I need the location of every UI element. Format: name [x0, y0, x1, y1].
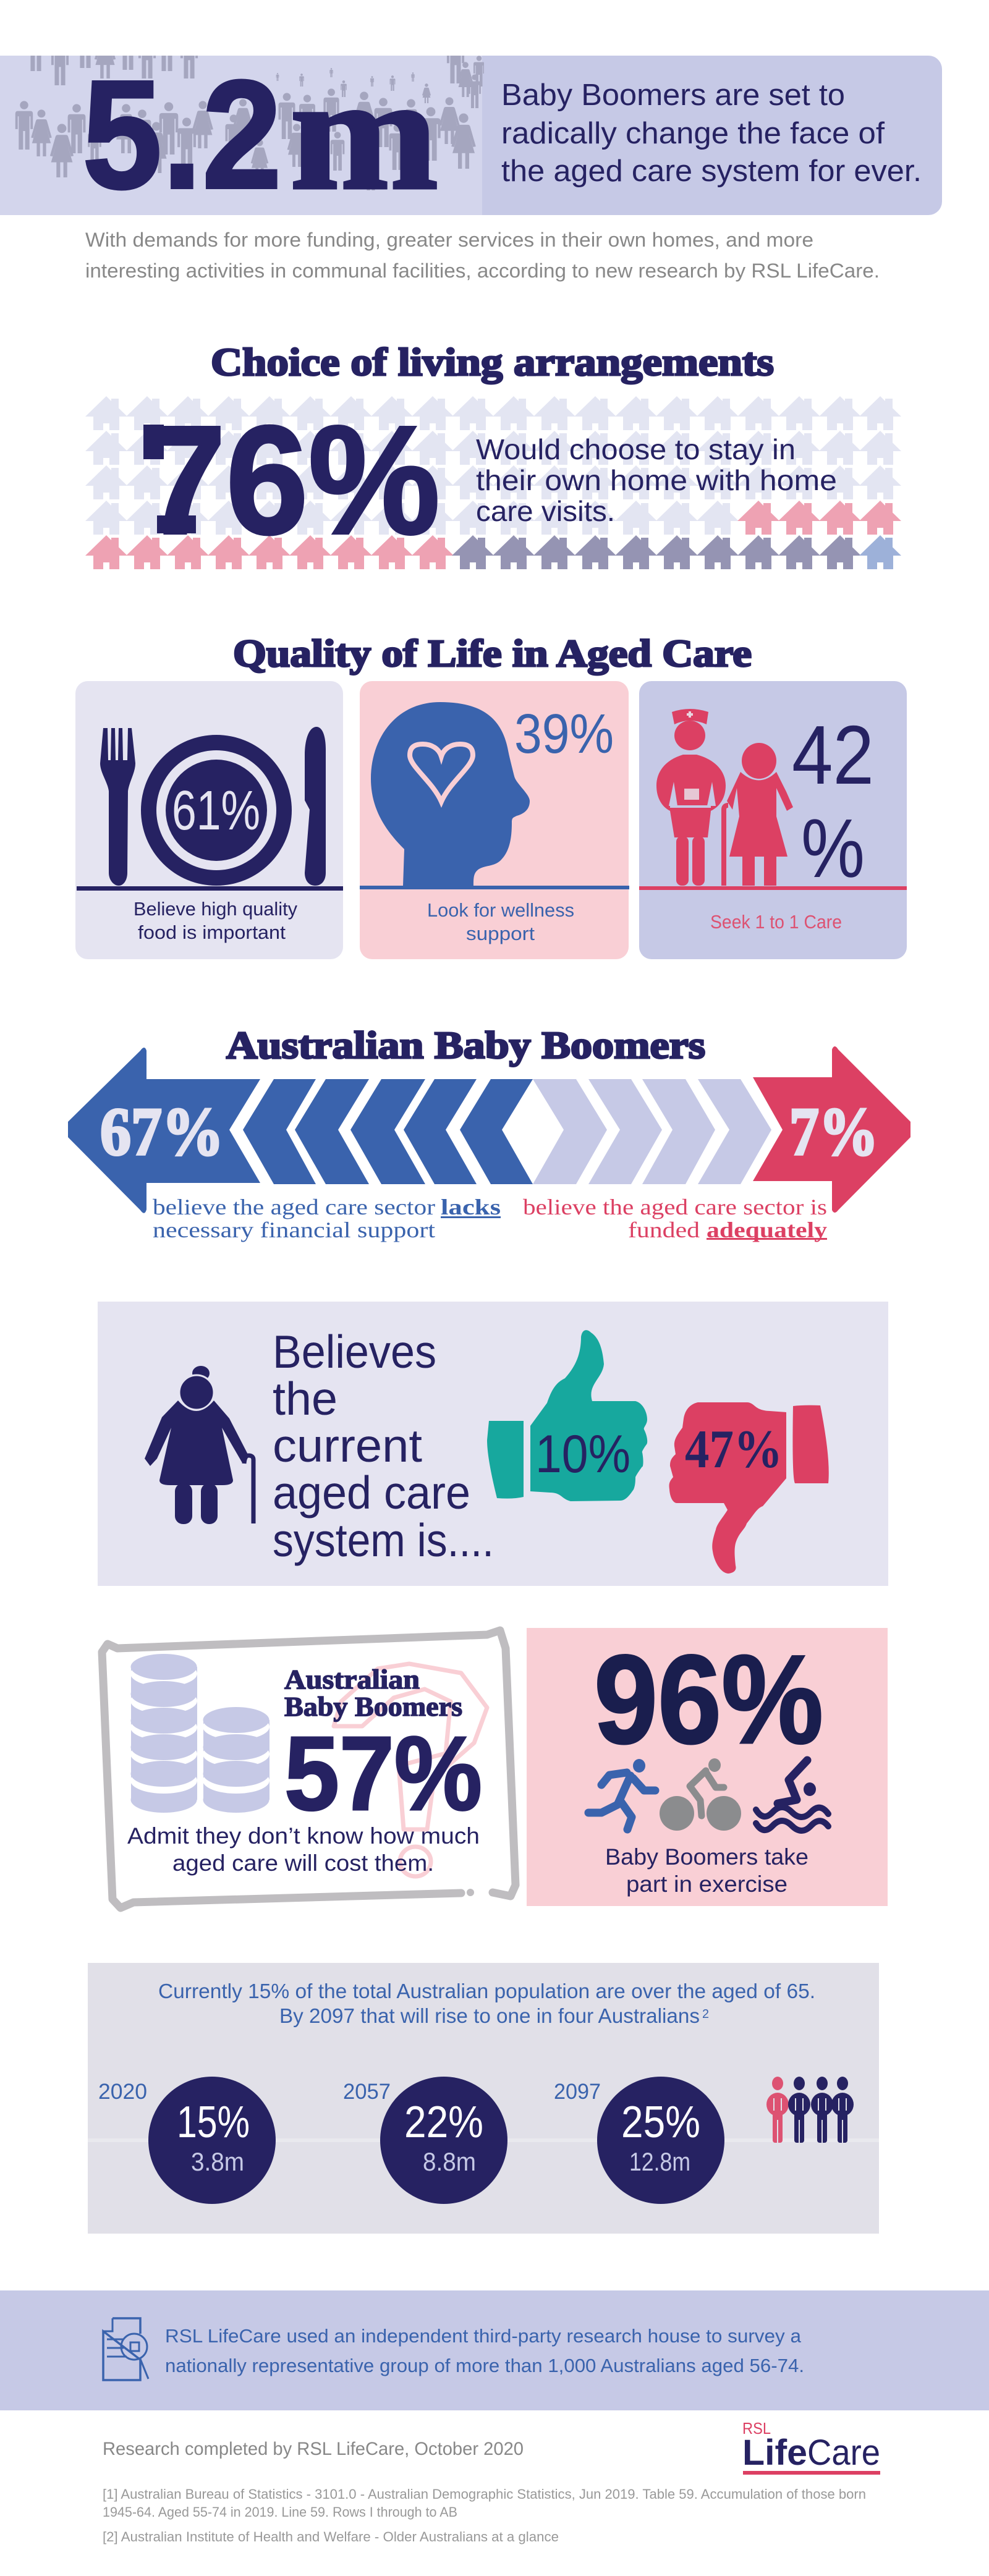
year labels: 2020 [98, 2080, 147, 2104]
right caption [523, 1195, 827, 1242]
headline statement: the aged care system for ever. [501, 155, 922, 188]
61 percent: 61% [172, 780, 260, 842]
intro text [85, 229, 880, 282]
circle 2097: 12.8m [629, 2147, 690, 2176]
47 percent: 47% [685, 1420, 783, 1480]
icon: head with heart [371, 702, 530, 886]
icon: plate [141, 735, 292, 886]
icon: nurse [656, 709, 726, 886]
caption: food is important [138, 922, 286, 943]
76 percent description: Would choose to stay in [476, 433, 796, 465]
statement: the [273, 1373, 337, 1425]
hero banner [0, 56, 942, 215]
circle 2057: 22% [404, 2098, 483, 2147]
right caption: funded [628, 1218, 700, 1242]
blue chevrons [243, 1079, 533, 1184]
circle 2057: 8.8m [423, 2147, 476, 2176]
sub-heading: Baby Boomers [284, 1692, 462, 1722]
footnotes: 1945-64. Aged 55-74 in 2019. Line 59. Rows I through to AB [103, 2504, 457, 2520]
7 percent: 7% [789, 1094, 878, 1169]
icon: runner [588, 1759, 655, 1829]
headline number: 5.2 [82, 48, 282, 221]
year labels: 2057 [343, 2080, 391, 2104]
icon: elderly woman with cane [724, 743, 793, 886]
panel: beliefs about current system [98, 1302, 888, 1586]
heading: Quality of Life in Aged Care [233, 633, 752, 675]
headline number [82, 44, 438, 223]
10 percent: 10% [535, 1425, 630, 1484]
headline statement [501, 78, 922, 188]
question mark sketch [334, 1664, 487, 1876]
section: quality of life [75, 633, 907, 959]
left caption: necessary financial support [153, 1218, 435, 1242]
research credit: Research completed by RSL LifeCare, October 2020 [103, 2439, 524, 2459]
caption: Believe high quality [134, 898, 297, 920]
76 percent figure: 76% [143, 394, 440, 566]
sub-heading: Australian [284, 1664, 420, 1695]
caption: support [466, 923, 535, 944]
caption: Admit they don’t know how much [127, 1823, 480, 1849]
icon: thumbs down [669, 1402, 829, 1574]
caption [605, 1844, 809, 1897]
67 percent: 67% [100, 1094, 224, 1169]
icon: elderly woman [145, 1366, 253, 1524]
39 percent: 39% [514, 703, 614, 765]
caption: part in exercise [626, 1871, 787, 1897]
caption: aged care will cost them. [172, 1850, 434, 1876]
logo: RSL LifeCare: Life [742, 2433, 807, 2473]
circle 2057 [380, 2077, 507, 2204]
circle 2020: 3.8m [191, 2147, 244, 2176]
footnotes [103, 2486, 866, 2544]
caption: Baby Boomers take [605, 1844, 809, 1870]
right caption: adequately [707, 1218, 827, 1242]
statement: Currently 15% of the total Australian population are over the aged of 65. [158, 1980, 815, 2002]
headline statement: radically change the face of [501, 117, 885, 150]
headline number: m [290, 44, 438, 223]
band: research methodology [0, 2290, 989, 2410]
icon: one in four people [766, 2077, 854, 2143]
panel: wellness [360, 681, 629, 959]
year labels: 2097 [554, 2080, 601, 2104]
left caption: lacks [441, 1195, 501, 1219]
sub-heading [284, 1664, 462, 1722]
panel: food [75, 681, 343, 959]
heading: Choice of living arrangements [211, 340, 774, 384]
76 percent description: their own home with home [476, 464, 837, 496]
intro text: interesting activities in communal facilities, according to new research by RSL LifeCare. [85, 260, 880, 282]
circle 2097 [597, 2077, 724, 2204]
icon: knife [305, 727, 326, 886]
statement [158, 1980, 815, 2027]
caption [427, 899, 574, 944]
statement [273, 1326, 494, 1566]
statement: Believes [273, 1326, 436, 1378]
left caption: believe the aged care sector [153, 1195, 435, 1219]
methodology text [165, 2325, 804, 2376]
logo: RSL LifeCare [742, 2419, 880, 2475]
statement: 2 [702, 2007, 709, 2021]
circle 2020 [148, 2077, 276, 2204]
crowd of people icons [15, 56, 484, 190]
statement: current [273, 1420, 422, 1472]
footnotes: [1] Australian Bureau of Statistics - 3101.0 - Australian Demographic Statistics, Jun 2019. Table 59. Accumulation of those born [103, 2486, 866, 2502]
circle 2020: 15% [177, 2098, 250, 2147]
caption: Seek 1 to 1 Care [710, 911, 842, 933]
circle 2097: 25% [621, 2098, 700, 2147]
right arrow [753, 1046, 910, 1213]
96 percent: 96% [594, 1629, 823, 1770]
methodology text: nationally representative group of more than 1,000 Australians aged 56-74. [165, 2355, 804, 2376]
76 percent description [476, 433, 837, 527]
footnotes: [2] Australian Institute of Health and Welfare - Older Australians at a glance [103, 2529, 559, 2544]
logo: RSL LifeCare: Care [807, 2433, 880, 2473]
panel: exercise [527, 1628, 888, 1906]
42 percent [792, 708, 874, 895]
year labels [98, 2080, 601, 2104]
57 percent: 57% [284, 1715, 482, 1832]
caption: Look for wellness [427, 899, 574, 921]
icon: cyclist [660, 1758, 741, 1831]
icon: coin stacks [130, 1654, 270, 1813]
icon: fork [100, 728, 135, 886]
panel: 1 to 1 care [639, 681, 907, 959]
right caption: believe the aged care sector is [523, 1195, 827, 1219]
left arrow [68, 1048, 260, 1213]
42 percent: % [801, 802, 865, 895]
hand-drawn frame [102, 1630, 516, 1908]
caption [134, 898, 297, 943]
icon: swimmer [756, 1760, 828, 1831]
statement: By 2097 that will rise to one in four Australians [279, 2004, 700, 2027]
icon: thumbs up [487, 1330, 647, 1501]
intro text: With demands for more funding, greater services in their own homes, and more [85, 229, 813, 251]
headline statement: Baby Boomers are set to [501, 78, 845, 112]
statement: aged care [273, 1467, 470, 1519]
banner background [0, 56, 942, 215]
heading: Australian Baby Boomers [226, 1025, 705, 1067]
section: choice of living arrangements [85, 340, 901, 569]
light chevrons [533, 1079, 771, 1184]
caption [127, 1823, 480, 1876]
section: Australian Baby Boomers arrows [68, 1025, 910, 1242]
methodology text: RSL LifeCare used an independent third-party research house to survey a [165, 2325, 802, 2347]
76 percent description: care visits. [476, 495, 615, 527]
panel: cost awareness [102, 1630, 516, 1908]
42 percent: 42 [792, 708, 874, 802]
logo: RSL LifeCare: RSL [742, 2419, 771, 2438]
house pictogram grid [85, 396, 901, 569]
panel: population projection [88, 1963, 879, 2234]
left caption [153, 1195, 501, 1242]
statement: system is.... [273, 1514, 494, 1566]
icon: document with magnifier [103, 2318, 148, 2380]
